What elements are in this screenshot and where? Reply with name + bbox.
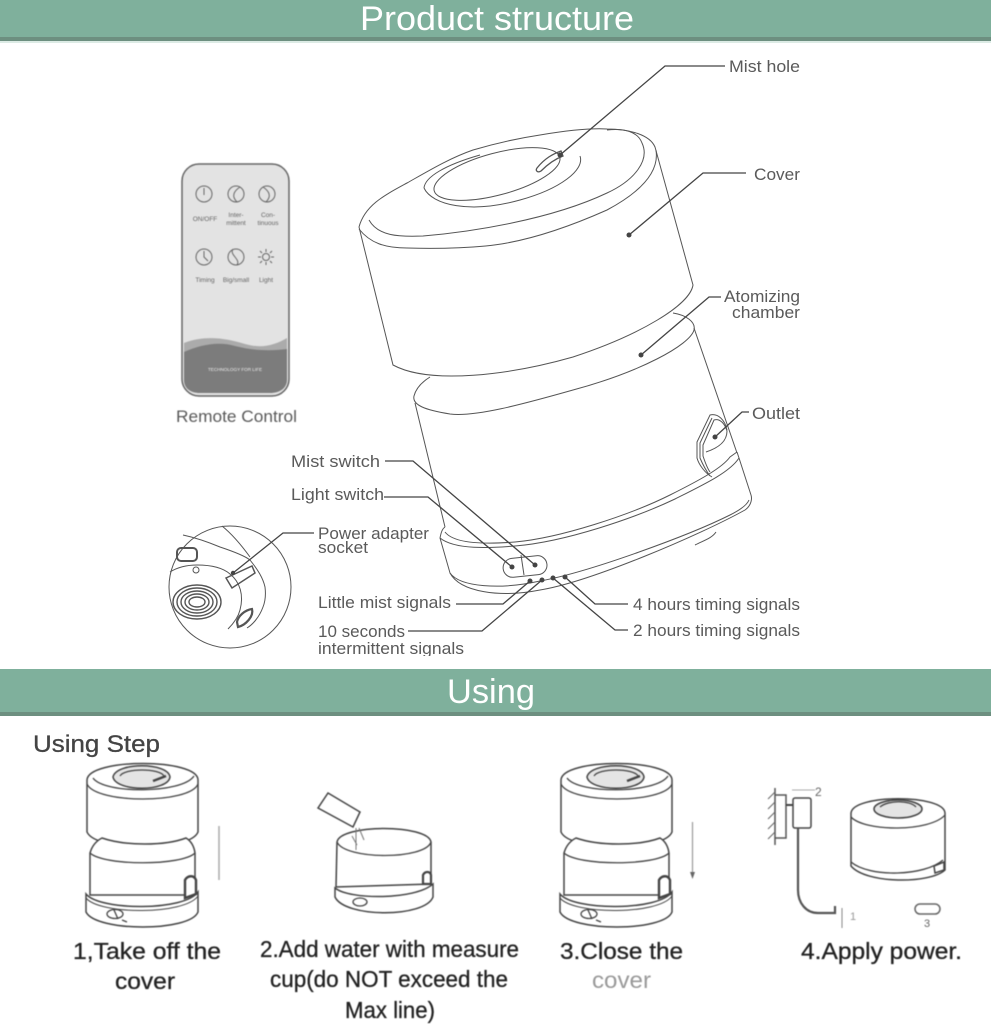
label: Mist switch xyxy=(291,453,538,568)
step 2: cup(do NOT exceed the xyxy=(270,966,508,992)
switch panel xyxy=(502,555,548,578)
header: Product structure xyxy=(0,0,991,43)
measuring cup xyxy=(318,793,360,827)
markers 1, 2 and 3: 3 xyxy=(924,918,930,930)
wall and adapter xyxy=(768,788,835,913)
label: 10 seconds intermittent signals: 10 seconds xyxy=(318,623,405,641)
step 1 xyxy=(73,764,221,964)
header: Using: Using xyxy=(447,673,535,711)
label: 4 hours timing signals: 4 hours timing signals xyxy=(633,596,800,614)
inset: power adapter socket xyxy=(169,525,430,648)
label: 2 hours timing signals xyxy=(550,576,800,640)
arrow down xyxy=(692,822,694,872)
label: Light switch: Light switch xyxy=(291,486,384,504)
label: Atomizing chamber xyxy=(638,288,801,358)
label: Mist switch: Mist switch xyxy=(291,453,380,471)
label: Atomizing chamber: Atomizing xyxy=(724,288,800,306)
label: 4 hours timing signals xyxy=(562,574,800,614)
label: 10 seconds intermittent signals: intermittent signals xyxy=(318,640,464,658)
coil xyxy=(173,585,221,619)
remote buttons: Big/small xyxy=(223,277,250,284)
step 4 xyxy=(768,785,962,964)
remote body: TECHNOLOGY FOR LIFE xyxy=(208,367,262,372)
remote buttons: Timing xyxy=(195,277,215,284)
panel: remote control xyxy=(176,164,297,426)
inset: power adapter socket: Power adapter xyxy=(318,525,430,543)
label: 2 hours timing signals: 2 hours timing signals xyxy=(633,622,800,640)
remote buttons xyxy=(193,186,279,284)
base xyxy=(440,452,751,593)
device xyxy=(851,799,945,880)
step 1 text: 1,Take off the xyxy=(73,938,221,964)
atomizing chamber xyxy=(414,313,694,414)
remote body xyxy=(182,164,289,396)
remote caption: Remote Control xyxy=(176,408,297,426)
step 4 text: 4.Apply power. xyxy=(801,938,962,964)
outlet xyxy=(697,415,727,477)
pot xyxy=(336,828,431,887)
step 3 xyxy=(560,764,695,993)
label: 10 seconds intermittent signals xyxy=(318,578,544,658)
chamber sides xyxy=(415,328,737,527)
step 2 xyxy=(260,793,519,1023)
label: Little mist signals xyxy=(318,578,532,612)
heading: Using Step: Using Step xyxy=(33,731,160,758)
label: Outlet xyxy=(712,405,800,440)
header: Product structure: Product structure xyxy=(360,0,634,38)
step 2: Max line) xyxy=(345,997,435,1023)
label: Mist hole: Mist hole xyxy=(729,58,800,76)
remote buttons: Con- xyxy=(261,212,275,219)
step 1 text line 2: cover xyxy=(115,968,175,994)
label: Little mist signals: Little mist signals xyxy=(318,594,451,612)
cover xyxy=(359,129,693,376)
remote buttons: Light xyxy=(259,277,273,284)
water xyxy=(352,828,364,850)
label: Mist hole xyxy=(558,58,800,158)
remote buttons: tinuous xyxy=(258,220,279,227)
inset: power adapter socket: socket xyxy=(318,539,368,557)
remote buttons: mittent xyxy=(226,220,246,227)
remote buttons: ON/OFF xyxy=(193,216,217,223)
label: Atomizing chamber: chamber xyxy=(732,304,801,322)
markers 1, 2 and 3: 1 xyxy=(850,911,856,923)
markers 1, 2 and 3: 2 xyxy=(815,785,822,799)
top ring xyxy=(424,137,581,211)
label: Light switch xyxy=(291,486,514,570)
device xyxy=(86,764,198,927)
product diagram xyxy=(291,58,801,658)
arrow up xyxy=(218,826,220,880)
label: Cover: Cover xyxy=(754,166,801,184)
step 2 text: 2.Add water with measure xyxy=(260,936,519,962)
markers 1, 2 and 3 xyxy=(792,785,940,930)
step 3: cover xyxy=(592,967,651,993)
label: Cover xyxy=(626,166,801,238)
header: Using xyxy=(0,656,991,716)
remote buttons: Inter- xyxy=(228,212,244,219)
step 3 text: 3.Close the xyxy=(560,938,683,964)
device xyxy=(560,764,672,927)
label: Outlet: Outlet xyxy=(752,405,800,423)
